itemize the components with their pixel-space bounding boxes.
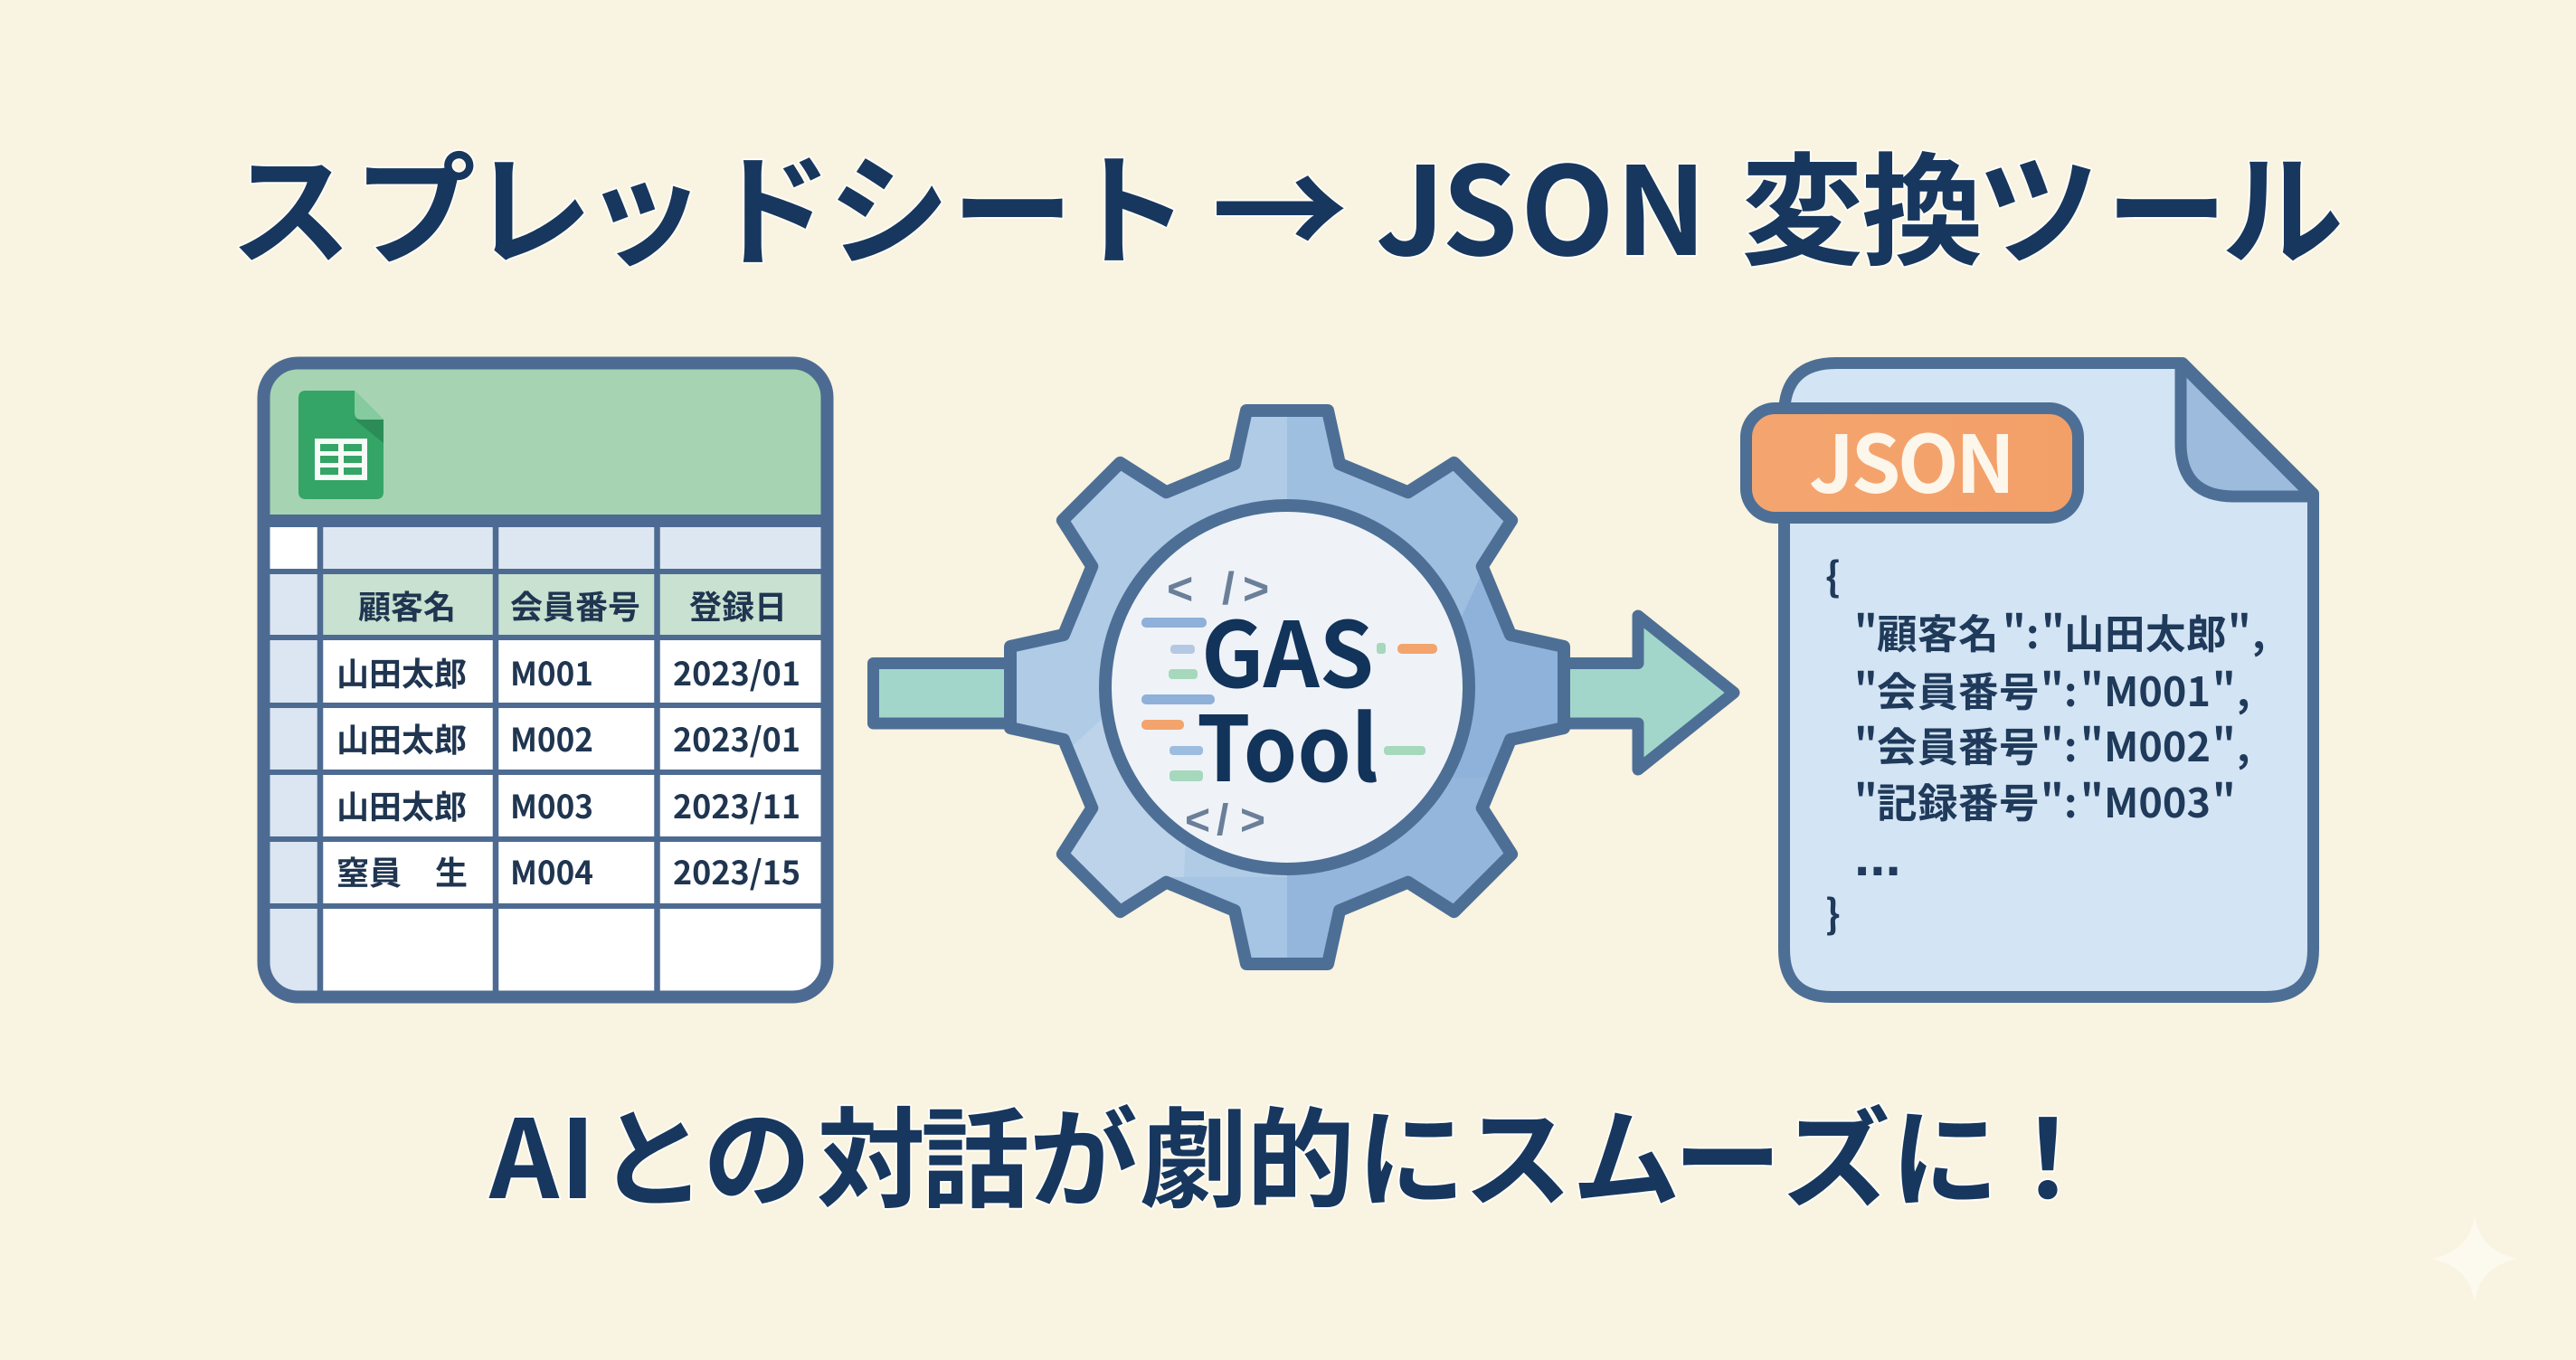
json code text: M001	[2104, 659, 2211, 718]
gear label Tool: Tool	[1197, 676, 1378, 808]
table header row: 会員番号	[510, 581, 640, 628]
json code text: :	[2064, 659, 2077, 718]
title: JSON	[1376, 113, 1707, 290]
table row 3: 2023/11	[673, 781, 800, 828]
json badge	[1746, 401, 2079, 517]
spreadsheet grid lines	[263, 364, 827, 996]
json code text: {	[1825, 544, 1841, 603]
panel: json document	[1746, 364, 2314, 996]
document folded corner	[2181, 364, 2313, 496]
table row 4: 窒員生	[336, 847, 468, 894]
gear hub	[1105, 505, 1469, 869]
table row 1: 山田太郎	[336, 648, 467, 695]
json code text: M002	[2104, 714, 2211, 773]
json code text: 会員番号	[1877, 659, 2040, 718]
code tag bottom: </>	[1185, 797, 1265, 845]
json code text: ,	[2237, 659, 2249, 718]
icon: google sheets	[298, 391, 384, 499]
title: スプレッドシート	[230, 113, 1189, 290]
table row 4: M004	[510, 847, 593, 894]
gear label GAS: GAS	[1201, 582, 1374, 713]
json code text: "	[1854, 659, 1878, 718]
json code text: :	[2064, 714, 2077, 773]
table header row: 登録日	[689, 581, 787, 628]
json code text: ...	[1854, 826, 1901, 888]
json code text: "	[2003, 601, 2026, 660]
json code text: "	[2080, 659, 2104, 718]
table row 2	[336, 714, 800, 761]
subtitle: AI	[488, 1072, 596, 1230]
document body	[1784, 364, 2314, 996]
json badge: JSON	[1809, 401, 2015, 516]
json code text: "	[2212, 770, 2236, 829]
spreadsheet cell fills	[258, 357, 833, 1003]
json code text	[1825, 544, 2265, 940]
code tag top: </>	[1167, 563, 1269, 614]
json code text: ,	[2252, 601, 2265, 660]
json code text: "	[2041, 601, 2065, 660]
json code text: :	[2064, 770, 2077, 829]
table row 3	[336, 781, 800, 828]
json code text: 山田太郎	[2064, 601, 2227, 660]
json code text: :	[2026, 601, 2039, 660]
json code text: 顧客名	[1877, 601, 1999, 660]
json code text: "	[2041, 659, 2064, 718]
json code text: "	[2080, 714, 2104, 773]
table header row: 顧客名	[358, 581, 456, 628]
json code text: "	[1854, 714, 1878, 773]
json code text: "	[1854, 770, 1878, 829]
json code text: "	[2041, 770, 2064, 829]
json code text: M003	[2104, 770, 2211, 829]
json code text: 記録番号	[1877, 770, 2040, 829]
table row 2: 2023/01	[673, 714, 800, 761]
table row 2: M002	[510, 714, 593, 761]
subtitle: との対話が劇的にスムーズに！	[598, 1072, 2102, 1230]
json code text: 会員番号	[1877, 714, 2040, 773]
json code text: "	[1854, 601, 1878, 660]
title: →	[1211, 101, 1349, 300]
gear	[998, 398, 1586, 977]
json code text: "	[2041, 714, 2064, 773]
table row 2: 山田太郎	[336, 714, 467, 761]
json code text: ,	[2237, 714, 2249, 773]
icon: watermark sparkle	[2431, 1215, 2518, 1302]
json code text: "	[2228, 601, 2251, 660]
json code text: "	[2080, 770, 2104, 829]
json code text: "	[2212, 714, 2236, 773]
table header row	[358, 581, 787, 628]
table row 4	[336, 847, 800, 894]
gear body	[998, 398, 1586, 977]
code decoration bars	[1141, 618, 1437, 781]
arrow: gear to json	[1560, 616, 1734, 770]
json code text: }	[1825, 882, 1841, 940]
table row 1: 2023/01	[673, 648, 800, 695]
infographic canvas	[237, 149, 2516, 1300]
table row 3: M003	[510, 781, 593, 828]
table row 1: M001	[510, 648, 593, 695]
table row 3: 山田太郎	[336, 781, 467, 828]
arrow: input to gear	[874, 664, 1018, 723]
panel: spreadsheet	[258, 357, 833, 1003]
title: 変換ツール	[1741, 113, 2344, 290]
json code text: "	[2212, 659, 2236, 718]
table row 1	[336, 648, 800, 695]
table row 4: 2023/15	[673, 847, 800, 894]
